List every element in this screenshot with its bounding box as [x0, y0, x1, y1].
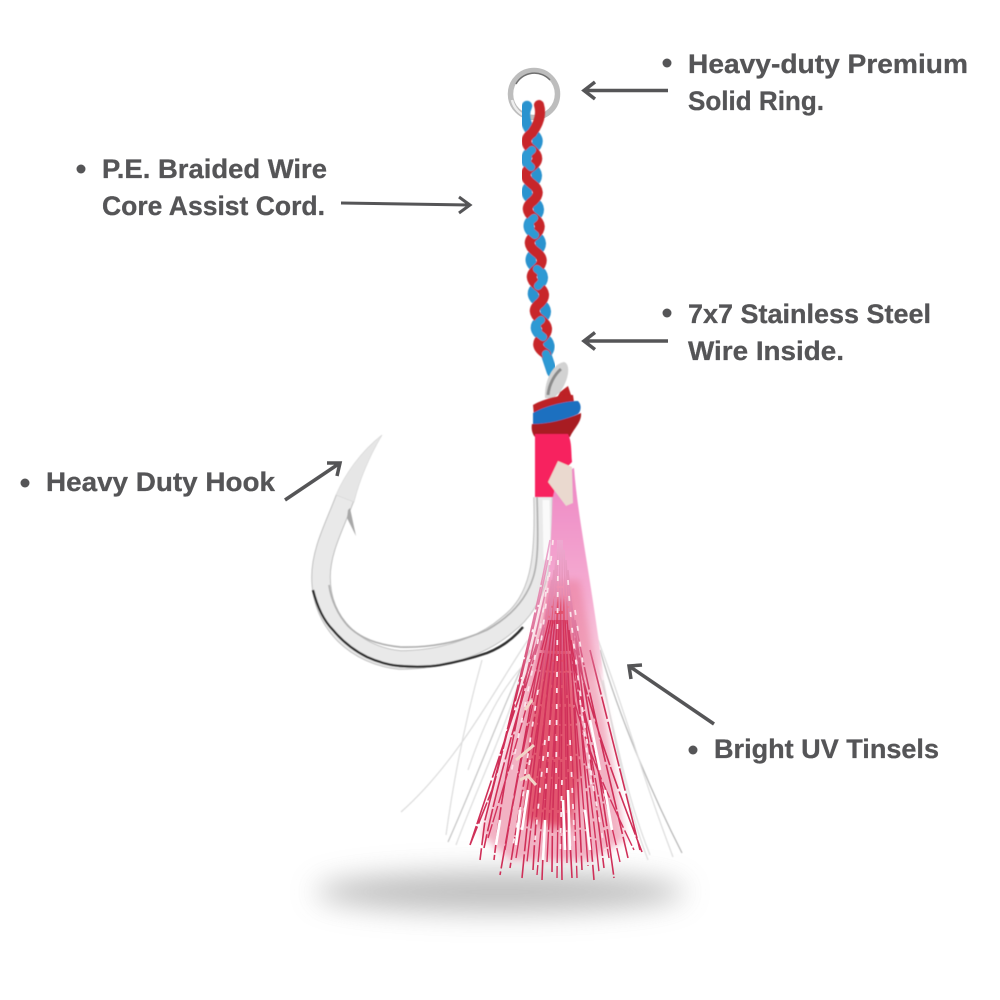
hook: bend body	[321, 497, 543, 660]
tinsels: gold glints	[516, 700, 536, 785]
callout: braided cord: Core Assist Cord.	[102, 191, 325, 221]
hook: inner gray line	[329, 497, 538, 647]
hook: dark outer edge	[313, 590, 523, 667]
arrow: to wire	[584, 332, 668, 350]
cord: blue strand	[525, 106, 552, 372]
callout: tinsels	[629, 665, 939, 764]
wrap: blue coil	[533, 401, 581, 424]
tinsels: blurred core mass	[482, 580, 625, 860]
callout: solid ring	[584, 49, 968, 116]
tinsels: crimson strands	[470, 540, 642, 880]
arrow: to ring	[584, 82, 668, 99]
pink tinsel fin	[534, 468, 604, 684]
callout: steel wire: 7x7 Stainless Steel	[688, 299, 931, 329]
wrap: pink thread	[535, 434, 572, 497]
cord: blue crossings	[526, 150, 552, 372]
braided cord	[525, 105, 552, 372]
ring	[510, 70, 558, 118]
hook: barb	[347, 508, 356, 536]
callout: braided cord: P.E. Braided Wire	[102, 154, 327, 184]
hook: shank shine	[546, 500, 547, 560]
wrap: diamond foil	[548, 461, 573, 506]
white tinsel strands	[401, 640, 682, 860]
UV tinsels	[470, 540, 642, 880]
callout: steel wire: Wire Inside.	[688, 336, 844, 366]
arrow: to cord	[341, 197, 470, 213]
tinsels: pale sparkle	[510, 540, 605, 860]
cord: red strand	[526, 105, 547, 354]
callout: steel wire	[584, 299, 931, 366]
hook: tapered point	[336, 435, 382, 502]
tinsels: red centre mass	[525, 600, 582, 830]
callout: solid ring: Heavy-duty Premium	[688, 49, 968, 79]
hook eye	[545, 362, 572, 400]
ground shadow	[315, 872, 685, 912]
thread wrap	[532, 395, 581, 506]
callout: tinsels: Bright UV Tinsels	[714, 734, 939, 764]
callout: braided cord	[76, 154, 470, 221]
tinsels: second strand layer	[488, 620, 634, 878]
callout: solid ring: Solid Ring.	[688, 86, 824, 116]
wrap: top red coil	[533, 395, 574, 416]
wrap: lower red coil	[532, 413, 581, 437]
arrow: to tinsels	[629, 665, 714, 724]
callout: heavy duty hook: Heavy Duty Hook	[46, 467, 276, 497]
hook: bend outline	[321, 497, 543, 660]
arrow: to hook	[285, 463, 340, 500]
hook	[313, 435, 547, 667]
callout: heavy duty hook	[20, 463, 340, 500]
tinsels: white gaps	[496, 720, 612, 860]
